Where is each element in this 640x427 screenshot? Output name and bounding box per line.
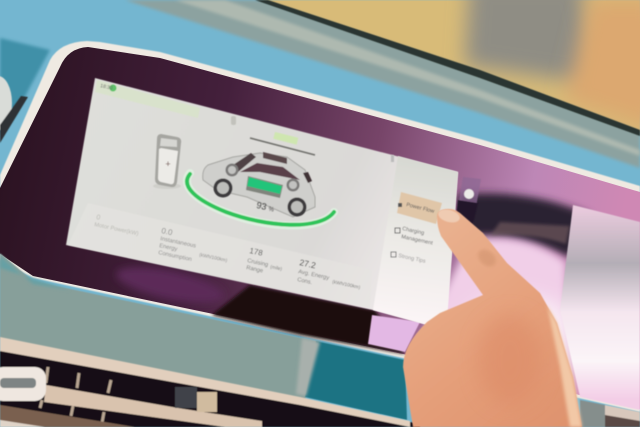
instantaneous consumption stat: Instantaneous	[160, 236, 197, 250]
average energy stat: Cons.	[297, 277, 313, 286]
side menu panel	[373, 156, 458, 330]
vent louvres	[40, 367, 111, 423]
roof line above the car	[250, 138, 315, 155]
side menu panel: Management	[401, 234, 434, 247]
cruising range stat: 178	[249, 246, 264, 258]
average energy stat: (kWh/100km)	[332, 279, 361, 291]
near wheels	[214, 178, 232, 198]
cruising range stat: (mile)	[270, 264, 283, 273]
side window	[240, 163, 300, 180]
far wheels	[226, 164, 238, 176]
fingernail	[437, 207, 461, 225]
roof rack	[263, 152, 287, 164]
stats bar	[68, 203, 372, 308]
side menu panel: Strong Tips	[398, 253, 426, 265]
blurred windshield trim	[125, 0, 640, 168]
battery pack	[246, 176, 283, 198]
car illustration	[203, 138, 315, 217]
tan lower louvre	[44, 385, 262, 427]
status bar	[95, 80, 394, 162]
vent knob	[0, 367, 46, 401]
power flow chip	[397, 192, 442, 224]
right reflection panel	[560, 205, 640, 410]
cruising range stat	[246, 246, 283, 275]
tan upper trim	[0, 337, 410, 427]
home button tab	[456, 177, 481, 224]
UI display panel	[66, 78, 458, 330]
grey felt dash strip	[0, 253, 407, 420]
menu labels: Power Flow	[406, 202, 435, 215]
average energy stat: Avg. Energy	[298, 269, 330, 282]
charging station icon: +	[165, 159, 171, 169]
knuckle shading	[475, 246, 499, 270]
instantaneous consumption stat: Energy	[159, 243, 178, 253]
black vent	[0, 345, 420, 427]
menu icons	[398, 203, 402, 207]
charging station icon	[153, 134, 181, 189]
instantaneous consumption stat: Consumption	[158, 250, 192, 263]
instantaneous consumption stat: (kWh/100km)	[199, 252, 228, 264]
hand lit edge	[547, 305, 582, 427]
left dash edge	[0, 76, 28, 143]
green charging arc	[187, 173, 334, 226]
average energy stat	[297, 257, 361, 291]
hand pointing at the screen	[403, 207, 582, 427]
windshield	[233, 153, 256, 172]
average energy stat: 27.2	[299, 257, 317, 270]
lower vent panel	[0, 337, 420, 427]
rear light	[303, 172, 312, 183]
instantaneous consumption stat: 0.0	[161, 226, 174, 237]
lower console	[0, 405, 135, 427]
status bar: 18:30	[100, 83, 113, 92]
right dash edge	[580, 400, 640, 427]
motor power stat	[94, 214, 139, 237]
motor power stat: 0	[96, 214, 101, 222]
battery percentage: 93 %	[256, 200, 276, 214]
cruising range stat: Range	[246, 265, 264, 275]
palm shadow	[478, 315, 542, 405]
motor power stat: Motor Power(kW)	[94, 222, 139, 237]
cruising range stat: Cruising	[247, 258, 269, 268]
side menu panel: Charging	[402, 226, 425, 237]
car body	[203, 153, 315, 217]
screen glare reflections	[113, 194, 640, 410]
instantaneous consumption stat	[158, 226, 228, 264]
vent slider	[175, 387, 197, 408]
